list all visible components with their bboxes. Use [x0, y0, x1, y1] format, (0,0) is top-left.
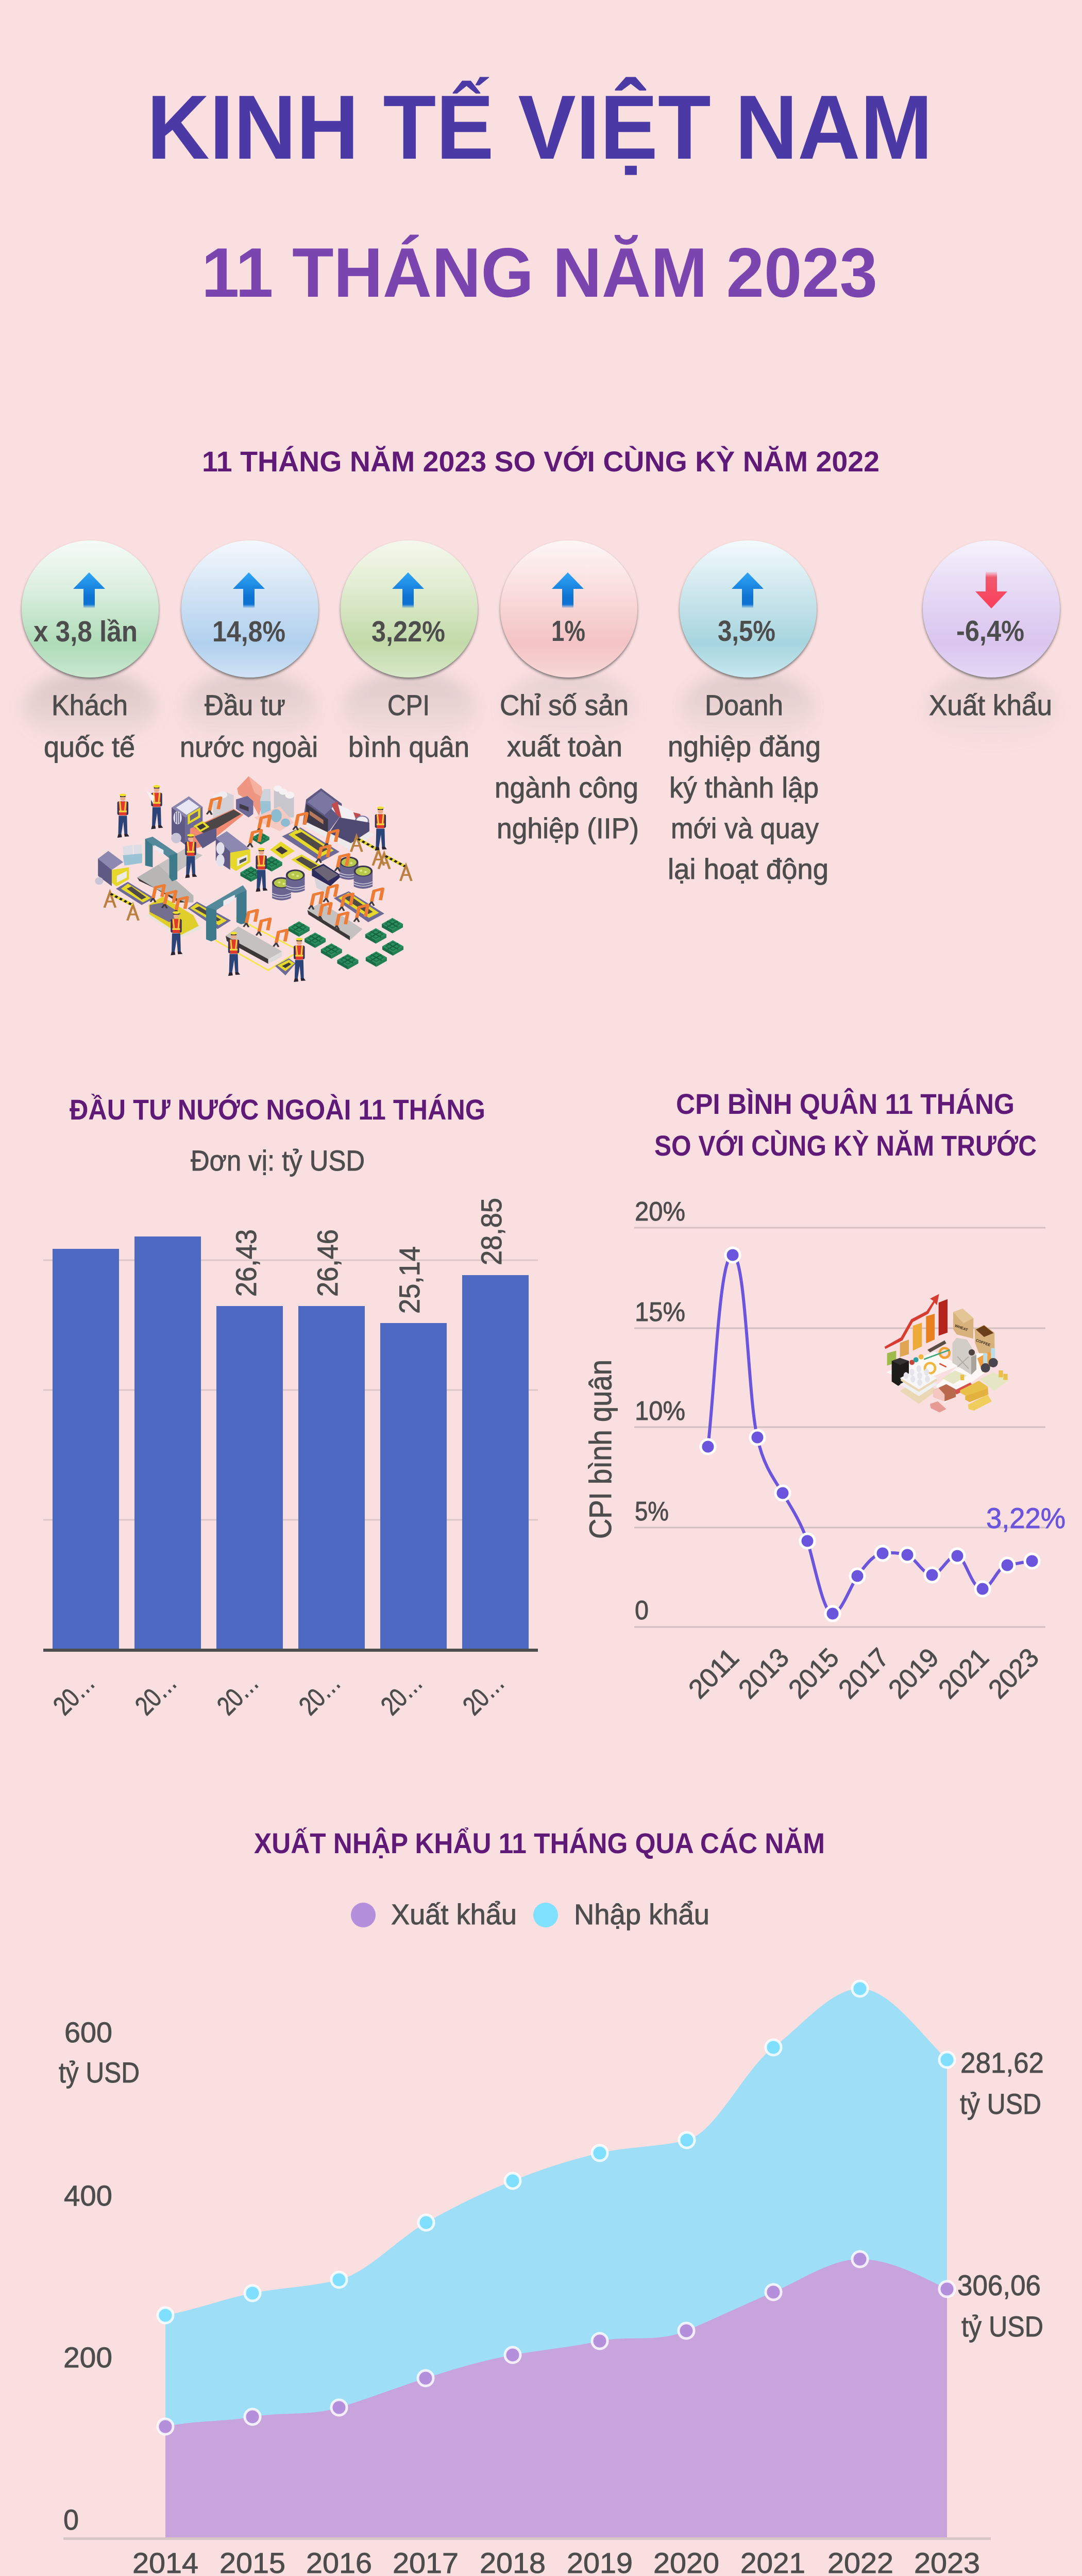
panel: new and returning businesses — [668, 540, 829, 885]
panel: average CPI — [341, 540, 478, 763]
panel: industrial production index: 1% — [551, 615, 585, 648]
bar chart: foreign investment — [43, 1198, 538, 1721]
panel: industrial production index: nghiệp (IIP) — [497, 812, 639, 844]
panel: industrial production index: ngành công — [495, 771, 638, 804]
bar chart: foreign investment: 20… — [457, 1668, 511, 1721]
area chart: imports and exports: 600 — [64, 2016, 112, 2048]
area chart: imports and exports: 400 — [64, 2179, 112, 2212]
bar chart: foreign investment: 20… — [129, 1668, 183, 1721]
illustration: goods and price chart — [885, 1294, 1008, 1413]
panel: industrial production index: Chỉ số sản — [500, 689, 629, 721]
heading: import export chart: XUẤT NHẬP KHẨU 11 THÁNG QUA CÁC NĂM — [254, 1827, 825, 1859]
bar chart: foreign investment: 20… — [211, 1668, 265, 1721]
area chart: imports and exports: 200 — [63, 2341, 112, 2374]
line chart: CPI: 2011 — [683, 1642, 745, 1704]
panel: foreign investment: 14,8% — [212, 615, 285, 648]
title: KINH TẾ VIỆT NAM — [147, 76, 933, 178]
heading: comparison with same period 2022: 11 THÁNG NĂM 2023 SO VỚI CÙNG KỲ NĂM 2022 — [202, 445, 880, 478]
panel: exports: Xuất khẩu — [929, 689, 1052, 721]
area chart: imports and exports: 0 — [63, 2503, 79, 2536]
line chart: CPI: 10% — [635, 1396, 685, 1426]
line chart: CPI: 3,22% — [986, 1502, 1066, 1534]
panel: industrial production index — [495, 540, 639, 844]
legend: Xuất khẩu — [391, 1898, 517, 1930]
bar chart: foreign investment: 25,14 — [393, 1246, 426, 1314]
illustration: goods and price chart: WHEAT — [954, 1323, 969, 1332]
panel: international visitors — [22, 540, 159, 763]
bar chart: foreign investment: 20… — [375, 1668, 429, 1721]
panel: exports — [923, 540, 1060, 745]
panel: international visitors: x 3,8 lần — [33, 615, 138, 648]
line chart: CPI: 2013 — [733, 1642, 795, 1704]
area chart: imports and exports: tỷ USD — [960, 2088, 1041, 2120]
panel: new and returning businesses: nghiệp đăng — [668, 730, 821, 762]
area chart: imports and exports: 281,62 — [960, 2046, 1044, 2079]
panel: foreign investment: nước ngoài — [180, 731, 318, 763]
panel: new and returning businesses: ký thành lập — [669, 771, 819, 804]
panel: new and returning businesses: 3,5% — [718, 615, 775, 648]
line chart: CPI: CPI bình quân — [583, 1360, 618, 1539]
panel: foreign investment — [180, 540, 318, 763]
panel: international visitors: Khách — [52, 689, 128, 721]
illustration: goods and price chart: COFFEE — [975, 1338, 991, 1347]
panel: average CPI: bình quân — [348, 731, 469, 763]
bar chart: foreign investment: 20… — [47, 1668, 101, 1721]
line chart: CPI — [583, 1197, 1066, 1704]
subtitle: 11 THÁNG NĂM 2023 — [201, 233, 877, 312]
bar chart: foreign investment: 26,46 — [311, 1229, 344, 1297]
heading: foreign investment chart: ĐẦU TƯ NƯỚC NGOÀI 11 THÁNG — [70, 1093, 485, 1126]
heading: CPI chart: SO VỚI CÙNG KỲ NĂM TRƯỚC — [654, 1129, 1037, 1162]
unit label: Đơn vị: tỷ USD — [191, 1144, 365, 1177]
panel: new and returning businesses: mới và quay — [671, 812, 819, 844]
heading: CPI chart: CPI BÌNH QUÂN 11 THÁNG — [676, 1088, 1015, 1120]
legend: Nhập khẩu — [574, 1898, 709, 1930]
bar chart: foreign investment: 26,43 — [230, 1229, 262, 1297]
line chart: CPI: 20% — [635, 1197, 685, 1227]
line chart: CPI: 15% — [635, 1297, 685, 1327]
area chart: imports and exports: tỷ USD — [961, 2310, 1043, 2343]
panel: average CPI: 3,22% — [371, 615, 445, 648]
panel: industrial production index: xuất toàn — [507, 730, 622, 762]
bar chart: foreign investment: 28,85 — [475, 1198, 508, 1265]
panel: average CPI: CPI — [387, 689, 430, 721]
panel: exports: -6,4% — [956, 615, 1024, 648]
line chart: CPI: 5% — [635, 1497, 669, 1527]
line chart: CPI: 0 — [635, 1596, 649, 1625]
line chart: CPI: 2023 — [983, 1642, 1045, 1704]
panel: new and returning businesses: Doanh — [705, 689, 783, 721]
panel: foreign investment: Đầu tư — [205, 689, 285, 721]
legend — [351, 1898, 709, 1930]
area chart: imports and exports — [59, 1981, 1044, 2576]
area chart: imports and exports: tỷ USD — [59, 2056, 140, 2089]
line chart: CPI: 2017 — [833, 1642, 895, 1704]
heading: CPI chart — [654, 1088, 1037, 1162]
illustration: isometric factory — [95, 776, 412, 982]
line chart: CPI: 2019 — [883, 1642, 945, 1704]
panel: international visitors: quốc tế — [44, 731, 135, 763]
bar chart: foreign investment: 20… — [293, 1668, 347, 1721]
line chart: CPI: 2015 — [783, 1642, 845, 1704]
panel: new and returning businesses: lại hoạt động — [668, 853, 829, 885]
line chart: CPI: 2021 — [933, 1642, 995, 1704]
area chart: imports and exports: 306,06 — [957, 2269, 1041, 2301]
